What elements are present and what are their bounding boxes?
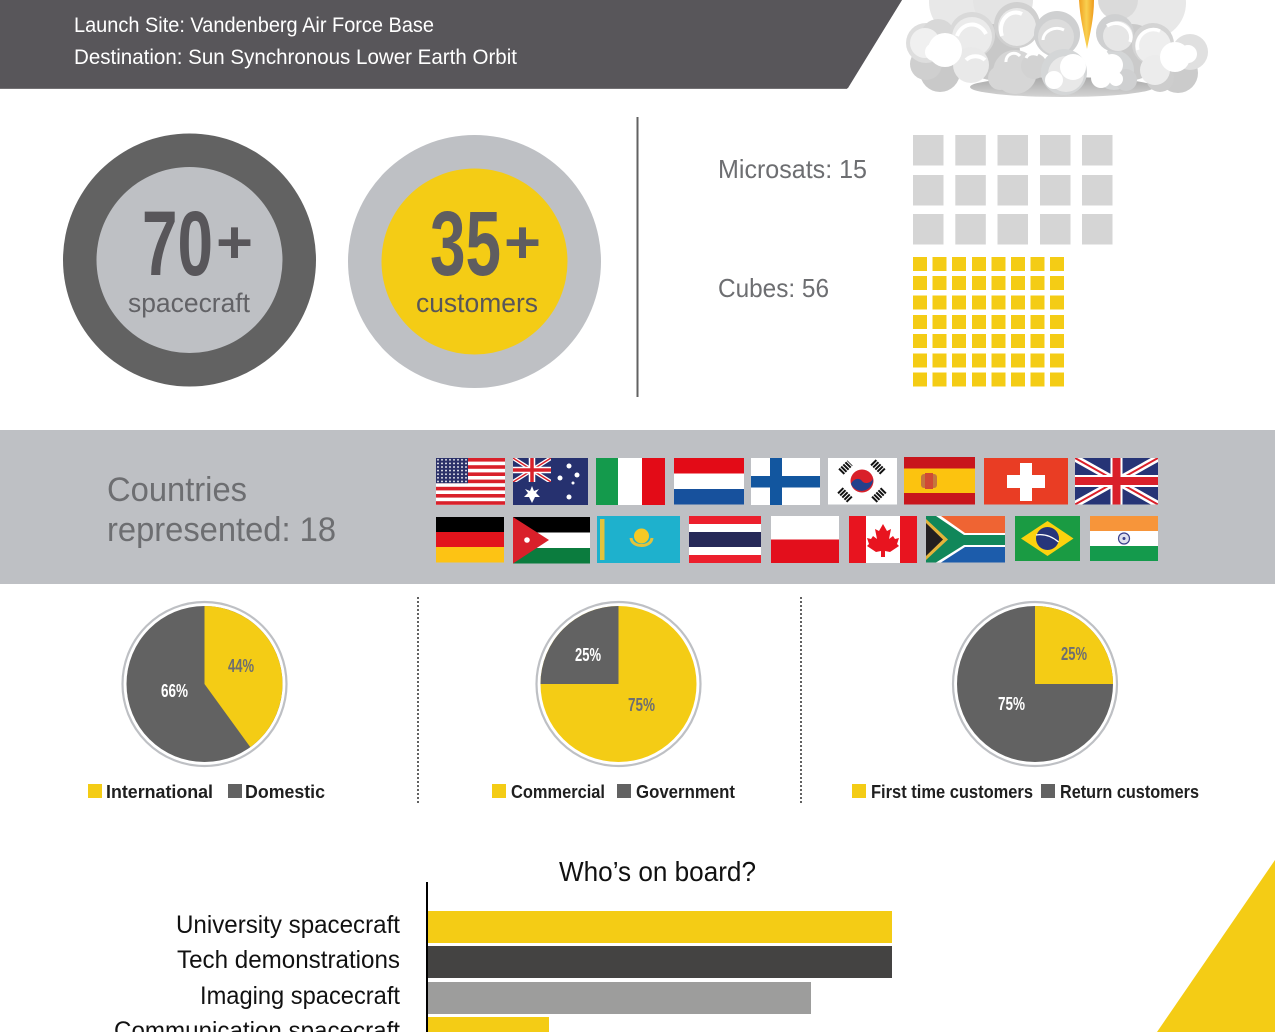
flag: Spain	[904, 457, 975, 504]
row: imaging spacecraft: Imaging spacecraft	[200, 982, 400, 1010]
legend: international, domestic	[88, 782, 325, 802]
stat label: spacecraft	[128, 288, 250, 318]
cubes label: Cubes: 56	[718, 273, 829, 303]
legend: commercial, government: Government	[636, 782, 735, 802]
header banner	[0, 0, 902, 89]
stat circle: 70+ spacecraft	[63, 134, 316, 386]
flag: Italy	[596, 458, 665, 505]
row: imaging spacecraft	[200, 982, 811, 1014]
panel: countries band	[0, 430, 1275, 584]
stat label: customers	[416, 288, 538, 318]
microsats label: Microsats: 15	[718, 154, 867, 184]
microsats unit grid	[913, 135, 1112, 244]
flag: Jordan	[513, 517, 590, 564]
legend: commercial, government: Commercial	[511, 782, 605, 802]
legend: first time, return customers: Return customers	[1060, 782, 1199, 802]
value: domestic: 66%	[161, 681, 188, 701]
row: university spacecraft	[176, 911, 892, 943]
legend: international, domestic: Domestic	[245, 782, 325, 802]
flag: South Korea	[828, 458, 897, 504]
countries heading: represented: 18	[107, 511, 336, 549]
flag: United States	[436, 458, 505, 505]
stat circle: 35+ customers	[348, 135, 601, 388]
value: international: 44%	[228, 656, 254, 676]
legend: commercial, government	[492, 782, 735, 802]
flag: Canada	[849, 516, 917, 563]
bar chart: who's on board	[114, 882, 892, 1032]
flag: South Africa	[926, 516, 1005, 562]
icon: rocket flame	[1079, 0, 1094, 49]
stat number: +	[504, 209, 541, 276]
flag: Brazil	[1015, 516, 1080, 561]
row: university spacecraft: University spacecraft	[176, 911, 400, 939]
flag: Switzerland	[984, 458, 1068, 504]
flag: United Kingdom	[1075, 458, 1158, 504]
chart axis	[426, 882, 428, 1032]
flag: Netherlands	[674, 458, 744, 504]
bar chart title: Who’s on board?	[559, 856, 756, 887]
flag: Germany	[436, 517, 504, 562]
pie chart: commercial vs government	[536, 602, 700, 766]
icon: rocket exhaust cloud	[906, 0, 1208, 97]
stat number: 70	[142, 193, 213, 295]
row: tech demonstrations: Tech demonstrations	[177, 946, 400, 974]
legend: international, domestic: International	[106, 782, 213, 802]
pie chart: first time vs return customers	[953, 602, 1117, 766]
stat number: 35	[430, 193, 501, 295]
flag: Thailand	[689, 516, 761, 563]
legend: first time, return customers: First time customers	[871, 782, 1033, 802]
value: first time customers: 25%	[1061, 644, 1087, 664]
flag: India	[1090, 516, 1158, 561]
destination text: Destination: Sun Synchronous Lower Earth Orbit	[74, 46, 517, 69]
value: commercial: 75%	[628, 695, 655, 715]
decorative yellow triangle	[1157, 860, 1275, 1032]
flag: Kazakhstan	[597, 516, 680, 563]
value: return customers: 75%	[998, 694, 1025, 714]
launch site text: Launch Site: Vandenberg Air Force Base	[74, 14, 434, 37]
flag: Finland	[751, 458, 820, 505]
legend: first time, return customers	[852, 782, 1199, 802]
stat number: +	[216, 209, 253, 276]
flag: Poland	[771, 516, 839, 563]
value: government: 25%	[575, 645, 601, 665]
countries heading: Countries	[107, 471, 247, 509]
countries heading	[107, 471, 336, 549]
flag: Australia	[513, 458, 588, 505]
pie chart: international vs domestic	[122, 602, 286, 766]
row: communication spacecraft	[114, 1017, 549, 1032]
row: tech demonstrations	[177, 946, 892, 978]
cubes unit grid	[913, 257, 1064, 386]
